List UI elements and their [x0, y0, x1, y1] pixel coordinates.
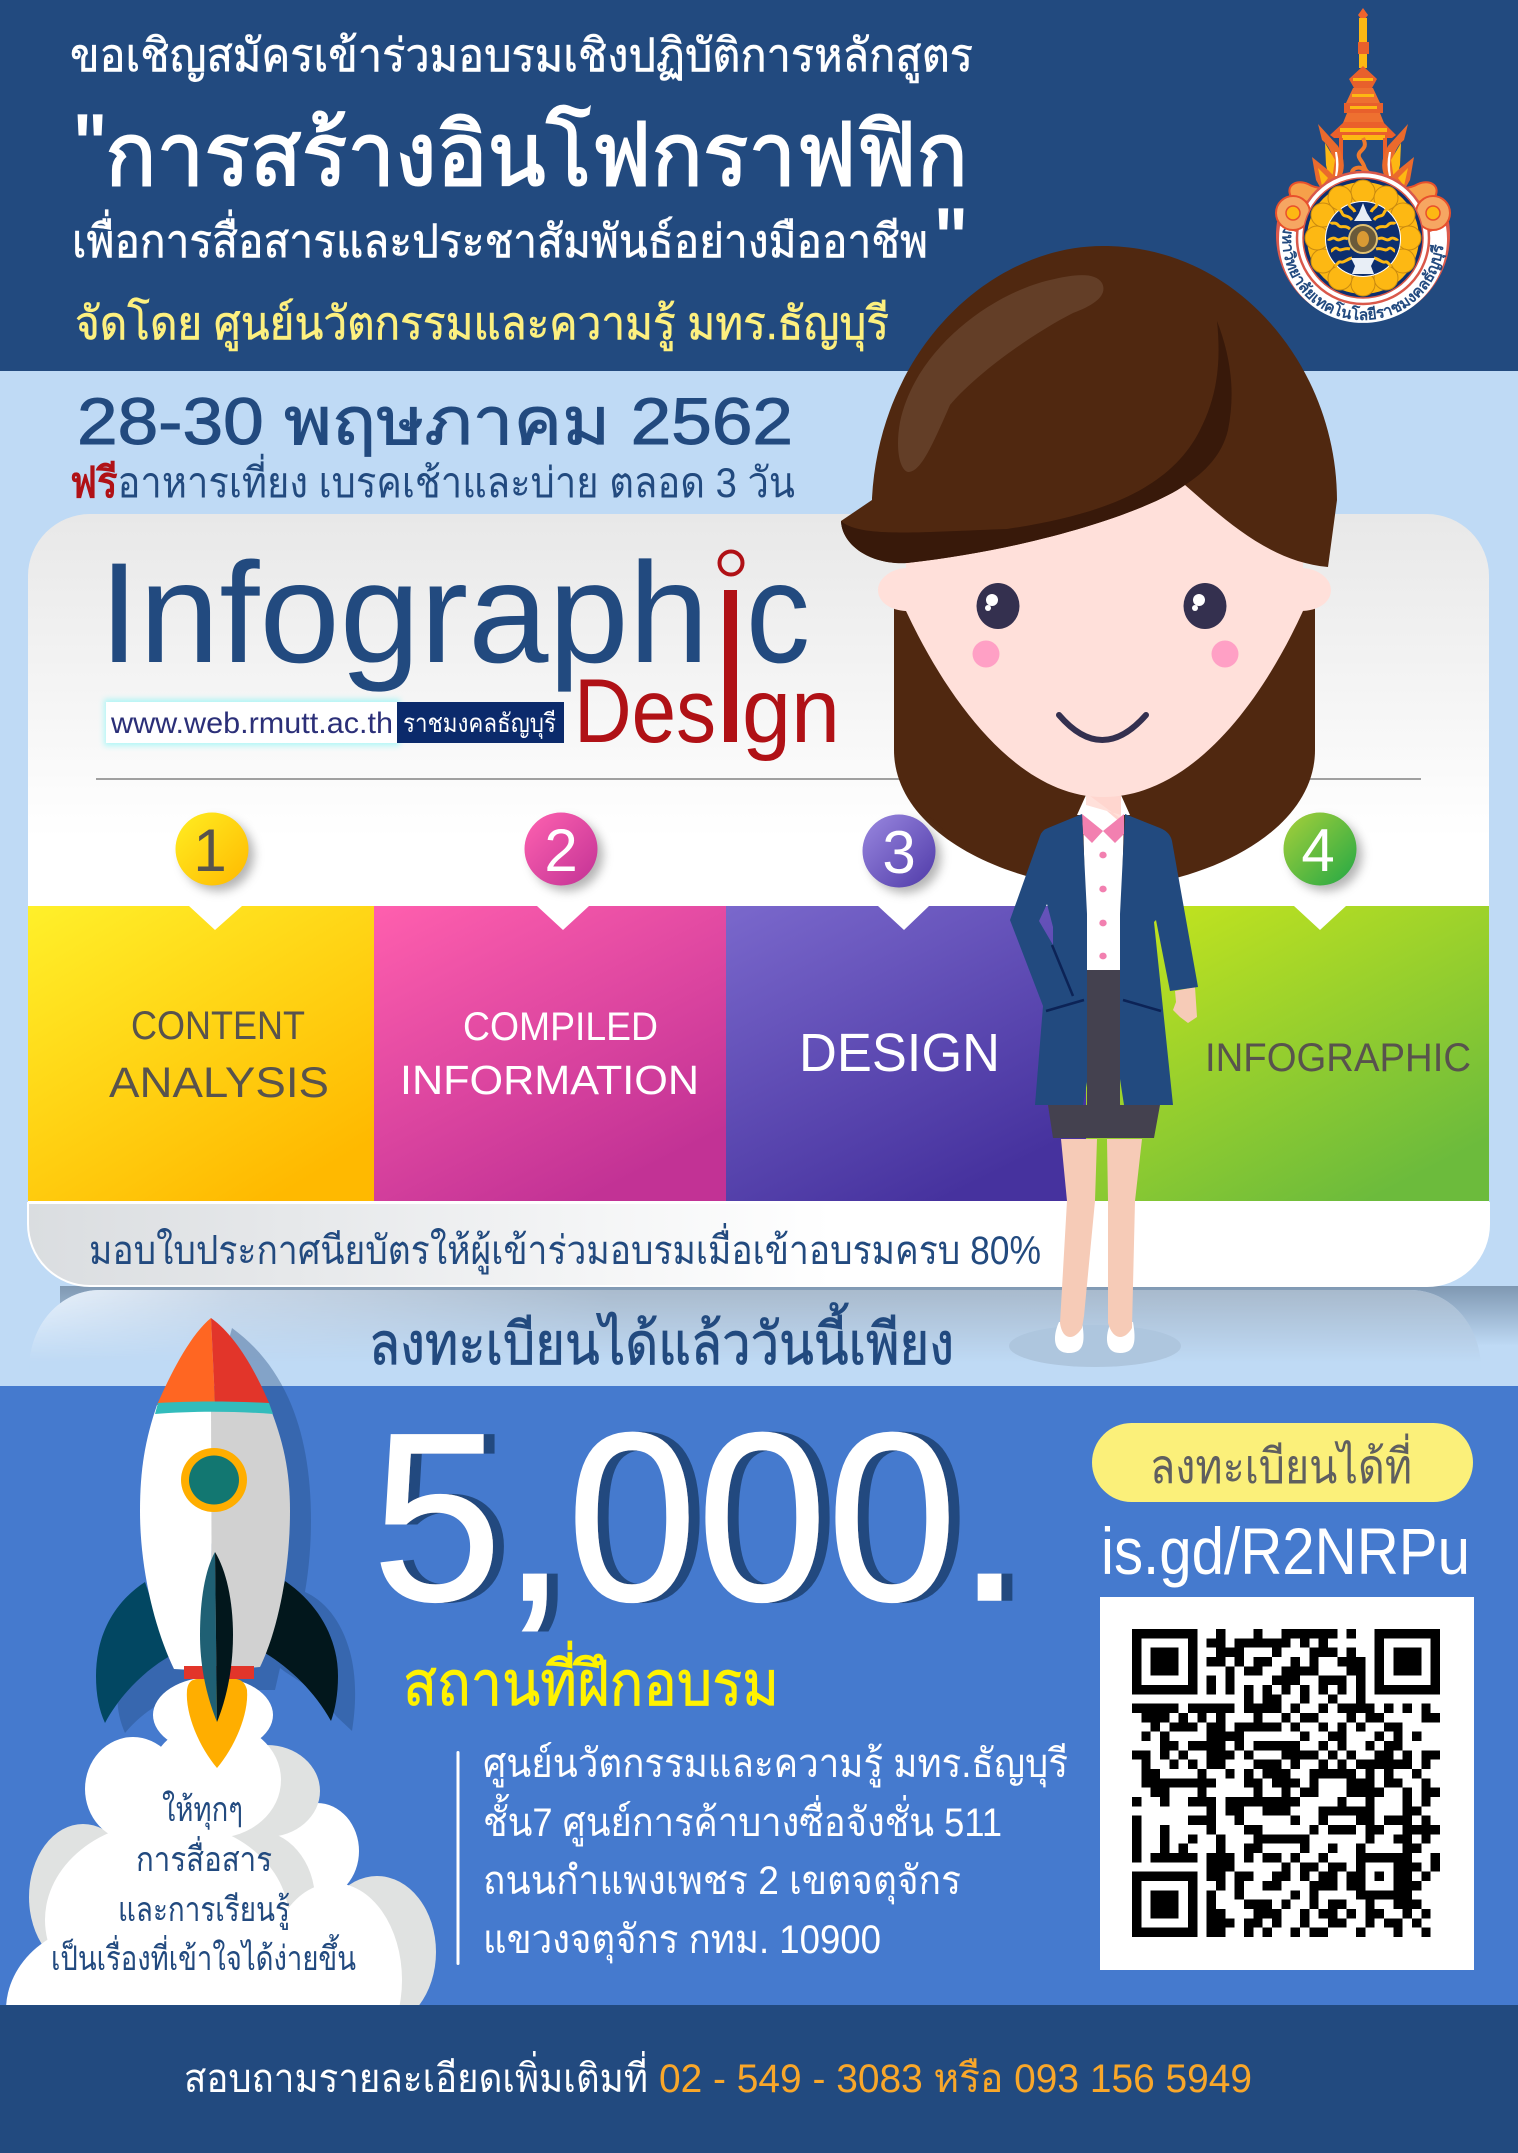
register pill [1092, 1423, 1473, 1502]
register pill: ลงทะเบียนได้ที่ [1150, 1433, 1412, 1494]
ground shadow [1009, 1325, 1181, 1367]
shirt [1077, 795, 1130, 971]
certificate strip [28, 1203, 1489, 1286]
badge 3: 3 [882, 819, 916, 886]
logo text: Infographic [99, 534, 810, 742]
step 3 panel [726, 906, 1086, 1201]
venue address: ศูนย์นวัตกรรมและความรู้ มทร.ธัญบุรี [483, 1741, 1068, 1788]
cloud caption [51, 1790, 356, 1978]
badge 4 [1284, 812, 1362, 891]
neck [1086, 785, 1121, 825]
medallion [1303, 178, 1423, 298]
buttons [1099, 852, 1107, 959]
naga right [1375, 124, 1437, 204]
spire [1330, 8, 1396, 162]
badge 2 [524, 812, 603, 891]
badge 4: 4 [1301, 817, 1335, 884]
smile [1059, 715, 1146, 740]
divider [96, 778, 1421, 780]
step 1 panel: ANALYSIS [109, 1059, 329, 1107]
hair highlight [898, 275, 1103, 472]
venue address: ถนนกำแพงเพชร 2 เขตจตุจักร [483, 1859, 961, 1905]
pockets [1046, 945, 1161, 1011]
badge 1: 1 [193, 817, 227, 884]
cloud caption: การสื่อสาร [136, 1836, 272, 1879]
QR code [1100, 1597, 1474, 1970]
naga left [1289, 124, 1351, 204]
step 2 panel: INFORMATION [400, 1057, 699, 1103]
badge 2: 2 [544, 817, 578, 884]
hair dome [841, 246, 1337, 567]
left fin [96, 1582, 170, 1723]
cheeks [972, 640, 1238, 668]
step 2 panel: COMPILED [463, 1005, 658, 1049]
centre fin [200, 1552, 217, 1722]
lower hair [894, 590, 1315, 889]
rocket illustration [6, 1318, 436, 2005]
shoes [1055, 1322, 1135, 1353]
hand [1173, 987, 1197, 1023]
short link: is.gd/R2NRPu [1101, 1514, 1470, 1588]
character: woman in blue jacket [841, 246, 1337, 1367]
card reflection [32, 1290, 1478, 1348]
nose cone [157, 1318, 215, 1405]
certificate strip: มอบใบประกาศนียบัตรให้ผู้เข้าร่วมอบรมเมื่อเข้าอบรมครบ 80% [89, 1223, 1041, 1274]
closing quote mark: " [936, 190, 966, 289]
badge 1 [176, 812, 254, 891]
icon: university emblem [1275, 8, 1451, 323]
cloud caption: ให้ทุกๆ [162, 1790, 243, 1830]
heading: register today: ลงทะเบียนได้แล้ววันนี้เพียง [369, 1303, 954, 1377]
flowers [1276, 196, 1450, 230]
central swirl [1352, 138, 1384, 184]
clouds and exhaust [6, 1679, 436, 2005]
heading: course title: การสร้างอินโฟกราฟฟิก [105, 105, 968, 204]
badge 3 [862, 814, 941, 893]
right fin [265, 1581, 338, 1721]
ears [878, 568, 1331, 611]
skirt [1048, 970, 1160, 1138]
logo text: Design [574, 661, 840, 762]
rocket shadow [118, 1328, 355, 1733]
venue address [456, 1741, 1068, 1965]
cloud caption: และการเรียนรู้ [118, 1891, 290, 1930]
step 1 panel: CONTENT [131, 1004, 305, 1048]
free meals line: ฟรีอาหารเที่ยง เบรคเช้าและบ่าย ตลอด 3 วัน [70, 454, 795, 506]
jacket [1010, 814, 1087, 1105]
floor shading under the card [60, 1286, 1518, 1346]
rocket body [140, 1405, 212, 1671]
price: 5,000. [372, 1383, 1022, 1651]
heading: course title: " [75, 96, 105, 195]
heading: invitation line: ขอเชิญสมัครเข้าร่วมอบรมเชิงปฏิบัติการหลักสูตร [70, 29, 973, 83]
step 4 panel [1086, 906, 1489, 1201]
collar [1082, 814, 1124, 843]
flame [187, 1679, 247, 1768]
panel: course card [28, 514, 1489, 1286]
date: 28-30 พฤษภาคม 2562 [77, 384, 793, 458]
face [906, 440, 1303, 797]
step 3 panel: DESIGN [799, 1023, 1000, 1083]
ribbon with arched name [1276, 170, 1450, 323]
step 1 panel [28, 906, 374, 1201]
phone numbers: 02 - 549 - 3083 หรือ 093 156 5949 [659, 2057, 1252, 2101]
logo text: Design: gn [742, 661, 840, 762]
website badge: www.web.rmutt.ac.th [110, 707, 393, 740]
registration fee blue section [0, 1386, 1518, 2005]
footer band [0, 2005, 1518, 2153]
header band [0, 0, 1518, 371]
contact line: สอบถามรายละเอียดเพิ่มเติมที่ [184, 2051, 648, 2101]
legs [1060, 1139, 1142, 1337]
website badge [104, 699, 564, 746]
heading: course subtitle: เพื่อการสื่อสารและประชาสัมพันธ์อย่างมืออาชีพ [72, 209, 928, 267]
step 4 panel: INFOGRAPHIC [1205, 1036, 1471, 1080]
background: light blue band [0, 371, 1518, 1386]
teal band [155, 1402, 273, 1414]
logo text: Infographic: c [746, 534, 810, 693]
organiser line: จัดโดย ศูนย์นวัตกรรมและความรู้ มทร.ธัญบุรี [75, 297, 889, 352]
engine base [184, 1666, 254, 1679]
eyes [976, 583, 1226, 629]
cloud caption: เป็นเรื่องที่เข้าใจได้ง่ายขึ้น [51, 1934, 356, 1978]
ribbon with arched name: มหาวิทยาลัยเทคโนโลยีราชมงคลธัญบุรี [1282, 228, 1446, 320]
venue address: แขวงจตุจักร กทม. 10900 [483, 1918, 881, 1964]
venue address: ชั้น7 ศูนย์การค้าบางซื่อจังชั่น 511 [483, 1793, 1002, 1846]
heading: venue: สถานที่ฝึกอบรม [403, 1641, 779, 1719]
logo text: Infographic: Infograph [99, 534, 709, 693]
fringe shadow [841, 321, 1232, 563]
logo text: Design: Des [574, 661, 716, 762]
step 2 panel [374, 906, 726, 1201]
window [181, 1448, 247, 1512]
website badge: ราชมงคลธัญบุรี [403, 708, 556, 739]
